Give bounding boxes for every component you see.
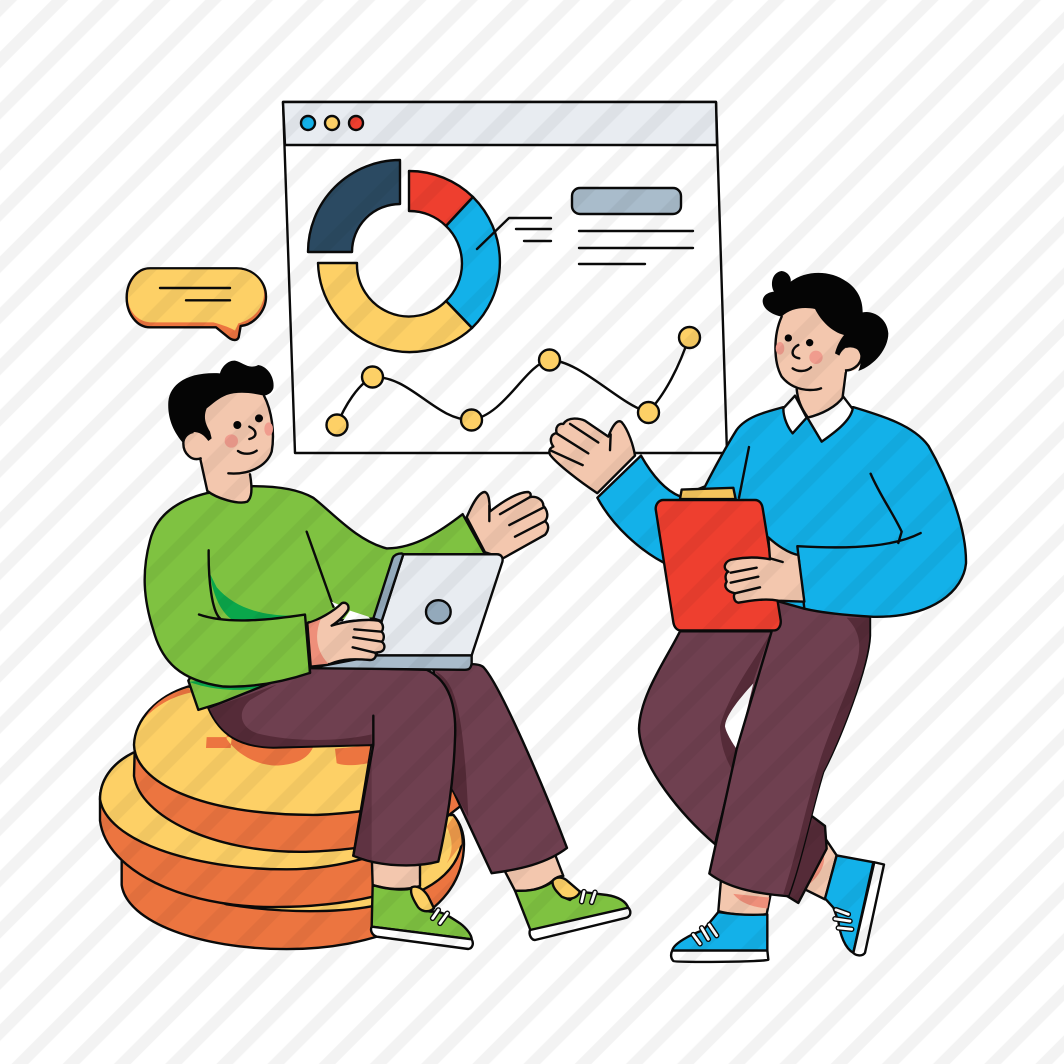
coin stack — [100, 687, 464, 949]
back shoe — [515, 878, 630, 940]
right person — [549, 407, 966, 962]
shirt hem — [188, 661, 273, 710]
back foot of left person — [500, 850, 630, 940]
collar — [783, 396, 853, 442]
hair — [168, 361, 274, 443]
ear — [182, 431, 208, 459]
back leg — [433, 664, 567, 873]
laptop base — [310, 655, 472, 670]
green sweater — [145, 486, 485, 687]
ear — [838, 346, 862, 371]
blue sweater — [597, 407, 966, 617]
front leg trousers — [208, 667, 455, 865]
nose and smile — [793, 345, 811, 371]
clipboard — [656, 488, 781, 630]
line chart — [326, 327, 700, 436]
laptop lid edge — [373, 553, 403, 621]
legend text lines — [579, 231, 693, 264]
coins and back leg of left person — [100, 664, 567, 949]
front ankle and shoe — [671, 871, 773, 962]
window control dots — [301, 116, 363, 130]
back foot — [803, 831, 884, 955]
hair — [763, 271, 888, 371]
laptop — [310, 553, 503, 670]
window title bar — [283, 102, 717, 145]
donut leader and legend lines — [477, 218, 551, 249]
speech bubble — [127, 268, 266, 340]
left person neck and head — [168, 361, 274, 503]
panel: dashboard window — [283, 102, 727, 453]
neck — [797, 370, 847, 417]
legend pill — [572, 188, 681, 214]
hand on clipboard — [725, 537, 804, 603]
nose and smile — [238, 427, 257, 454]
coin currency mark — [206, 731, 373, 766]
laptop screen — [377, 554, 503, 655]
front trouser leg — [709, 577, 870, 896]
front shoe — [371, 885, 473, 949]
raised hand — [549, 419, 635, 493]
face — [190, 388, 273, 473]
blush — [776, 342, 784, 355]
eyes — [785, 334, 792, 342]
left person body — [145, 486, 548, 865]
face — [775, 302, 845, 389]
hand on laptop — [307, 602, 384, 666]
eyes — [233, 421, 241, 429]
right person head — [763, 271, 888, 442]
back trouser leg — [639, 631, 827, 903]
front foot of left person — [371, 853, 473, 949]
neck — [200, 448, 251, 503]
blush — [225, 434, 238, 448]
laptop logo — [426, 600, 451, 623]
donut chart — [308, 160, 500, 352]
raised hand — [467, 492, 548, 558]
